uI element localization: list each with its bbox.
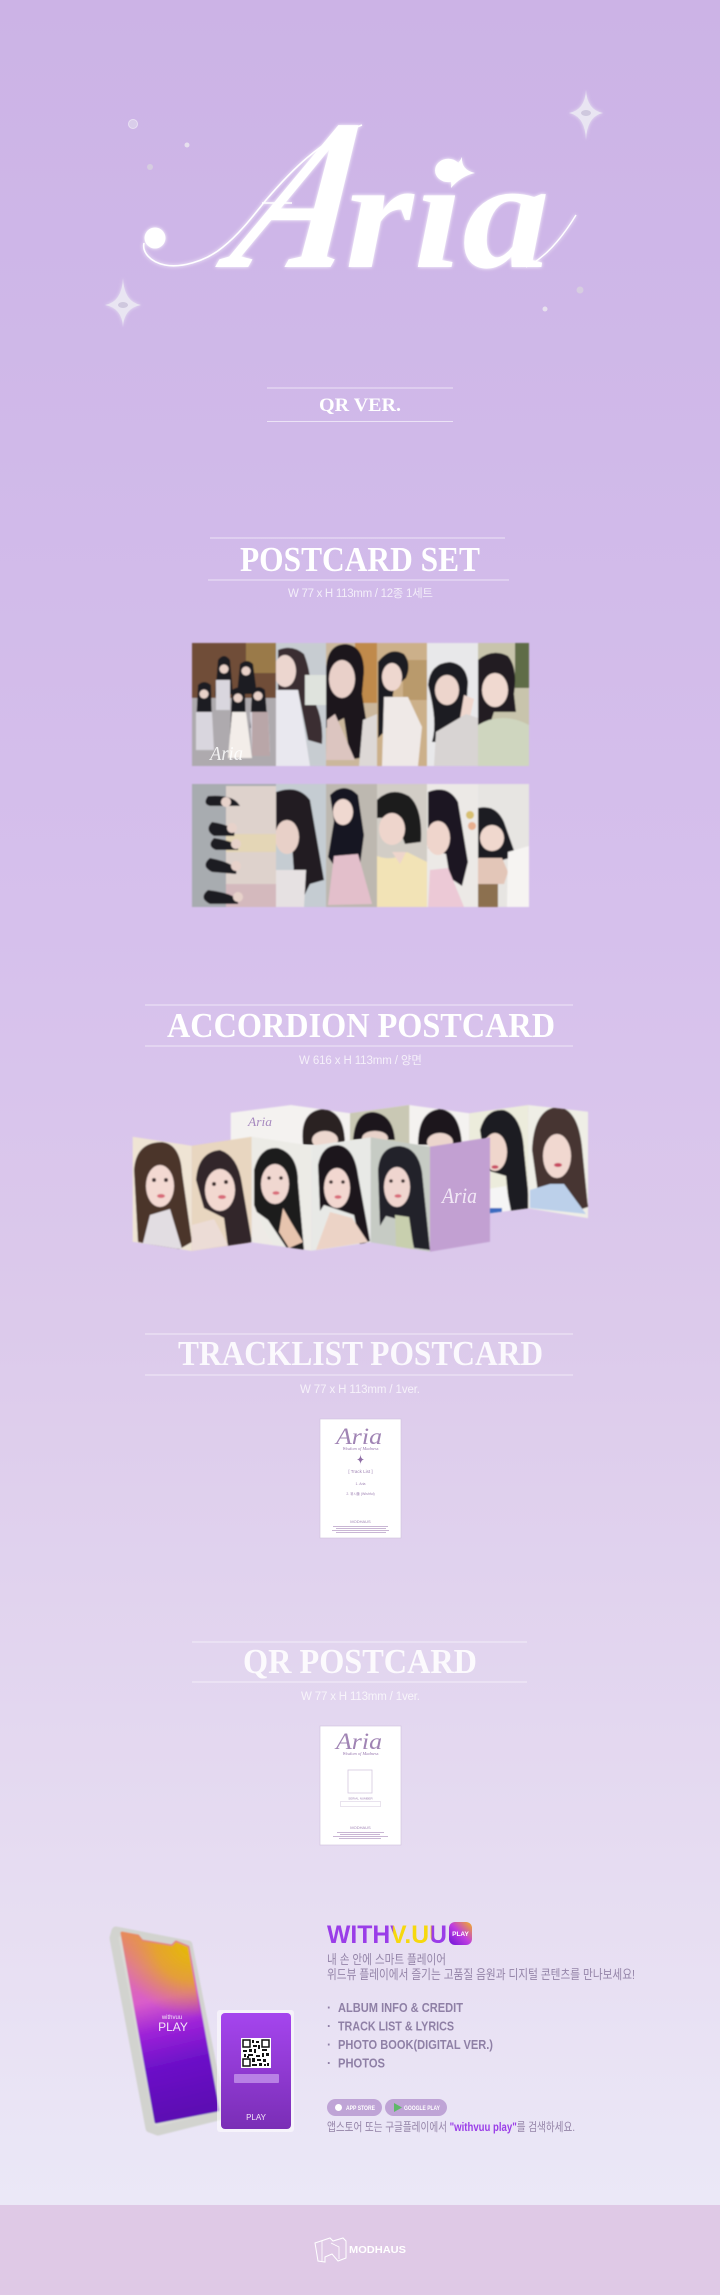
title: Aria logo: A — [196, 76, 416, 314]
sparkle: top right — [569, 90, 603, 140]
QR card mockup: PLAY — [246, 2113, 267, 2122]
intro copy: 내 손 안에 스마트 플레이어 — [327, 1952, 446, 1967]
tracklist postcard card: MODHAUS — [350, 1519, 371, 1524]
intro copy: 위드뷰 플레이에서 즐기는 고품질 음원과 디지털 콘텐츠를 만나보세요! — [327, 1967, 635, 1982]
postcard set: row 1 album text: Aria — [208, 743, 243, 765]
QR postcard card: SERIAL NUMBER — [348, 1796, 374, 1800]
tracklist postcard card — [320, 1419, 401, 1538]
tracklist postcard card: Wisdom of Madness — [342, 1446, 379, 1451]
QR postcard card: Aria — [334, 1729, 382, 1754]
title: Aria logo: ria — [345, 128, 550, 301]
tracklist postcard card: Aria — [334, 1424, 382, 1449]
footer logo: MODHAUS: MODHAUS — [349, 2245, 406, 2256]
heading: QR postcard: QR POSTCARD — [243, 1642, 477, 1681]
phone screen logo: withvuu — [161, 2015, 182, 2021]
decorative pearl dots — [128, 120, 584, 312]
heading: postcard set: W 77 x H 113mm / 12종 1세트 — [288, 587, 433, 600]
QR postcard card: Wisdom of Madness — [342, 1751, 379, 1756]
button: app store: APP STORE — [346, 2105, 376, 2112]
heading: tracklist postcard — [145, 1334, 573, 1396]
accordion postcard: front strip — [132, 1136, 490, 1252]
accordion postcard: back strip — [231, 1104, 588, 1219]
button: google play: GOOGLE PLAY — [404, 2105, 441, 2112]
button: google play — [385, 2099, 447, 2116]
button: app store — [327, 2099, 382, 2116]
feature list: · — [327, 2038, 331, 2052]
tracklist postcard card: 2. 위시풀 (Wishful) — [346, 1491, 375, 1496]
heading: tracklist postcard: W 77 x H 113mm / 1ver. — [300, 1384, 420, 1396]
heading: postcard set: POSTCARD SET — [240, 540, 480, 579]
postcard set: row 1 photos — [192, 643, 529, 766]
sparkle: bottom left — [105, 278, 141, 327]
feature list: · — [327, 2056, 331, 2070]
search instruction: 앱스토어 또는 구글플레이에서 "withvuu play"를 검색하세요. — [327, 2120, 575, 2134]
intro copy — [327, 1952, 635, 1982]
feature list: · — [327, 2020, 331, 2034]
heading: tracklist postcard: TRACKLIST POSTCARD — [178, 1334, 543, 1373]
phone screen logo: PLAY — [158, 2020, 188, 2034]
feature list: ALBUM INFO & CREDIT — [338, 2001, 463, 2015]
postcard set: row 2 photos — [192, 784, 529, 907]
heading: accordion postcard — [145, 1005, 573, 1067]
heading: QR postcard — [192, 1642, 527, 1703]
feature list: PHOTO BOOK(DIGITAL VER.) — [338, 2038, 493, 2052]
accordion postcard: cover text: Aria — [440, 1183, 477, 1208]
heading: accordion postcard: W 616 x H 113mm / 양면 — [299, 1054, 422, 1067]
QR postcard card — [320, 1726, 401, 1845]
title: Aria logo — [144, 76, 576, 314]
heading: QR postcard: W 77 x H 113mm / 1ver. — [301, 1691, 420, 1703]
feature list: PHOTOS — [338, 2056, 385, 2070]
feature list — [327, 2001, 493, 2070]
tracklist postcard card: 1. Aria — [356, 1482, 366, 1486]
feature list: TRACK LIST & LYRICS — [338, 2020, 454, 2034]
version label: QR VER.: QR VER. — [319, 395, 401, 416]
tracklist postcard card: [ Track List ] — [348, 1469, 373, 1474]
footer band — [0, 2205, 720, 2295]
logo: withvuu play: WITHV.UU — [327, 1921, 447, 1949]
QR card mockup — [217, 2010, 294, 2132]
footer logo: MODHAUS — [315, 2238, 406, 2262]
heading: accordion postcard: ACCORDION POSTCARD — [167, 1006, 555, 1045]
QR code — [241, 2038, 271, 2068]
feature list: · — [327, 2001, 331, 2015]
heading: postcard set — [208, 538, 509, 600]
accordion postcard: back strip album text: Aria — [247, 1114, 273, 1129]
QR postcard card: MODHAUS — [350, 1825, 371, 1830]
phone mockup — [114, 1930, 225, 2131]
logo: withvuu play: PLAY — [452, 1931, 470, 1938]
